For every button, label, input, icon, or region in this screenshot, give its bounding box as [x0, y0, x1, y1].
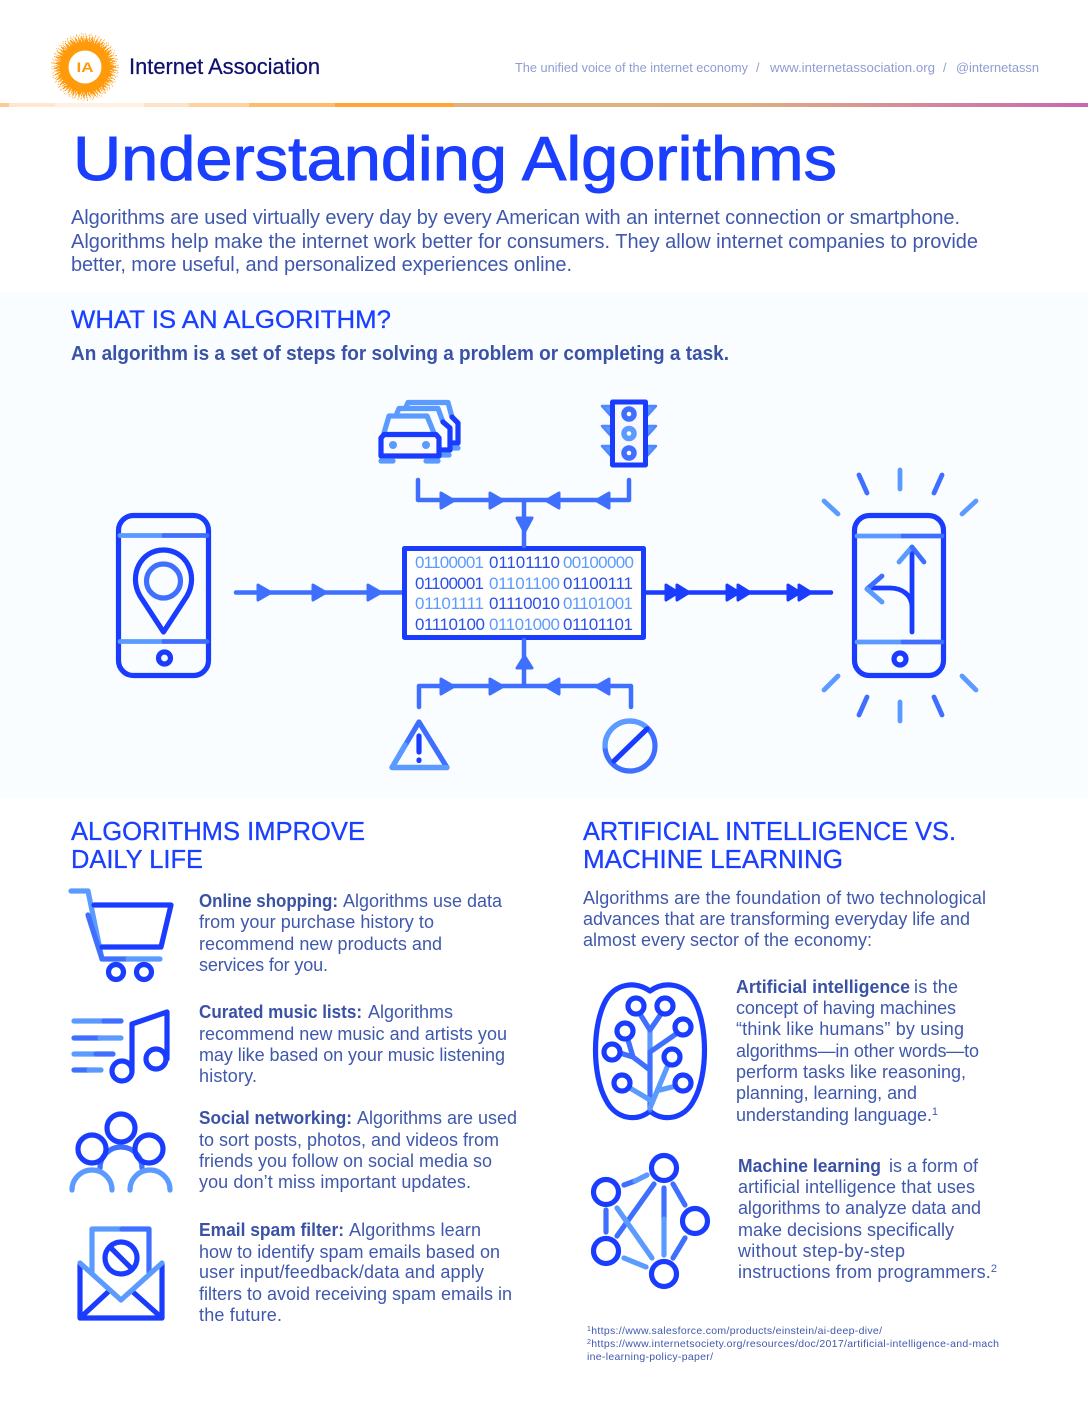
text: artificial intelligence: perform tasks like reasoning,	[736, 1062, 966, 1082]
text: artificial intelligence: concept of having machines	[736, 998, 956, 1018]
intro paragraph: better, more useful, and personalized experiences online.	[71, 254, 572, 276]
text: social networking: friends you follow on social media so	[199, 1151, 492, 1171]
algorithm box with binary code: 01100001	[415, 553, 484, 572]
algorithm box with binary code: 01101110	[489, 553, 560, 572]
icon: email spam filter	[80, 1229, 162, 1318]
heading: algorithms improve daily life: DAILY LIFE	[71, 844, 203, 874]
algorithm box with binary code: 01101000	[489, 615, 560, 634]
algorithm box with binary code: 00100000	[563, 553, 634, 572]
text: online shopping	[199, 891, 503, 975]
text: AI vs ML intro	[583, 888, 986, 950]
footnotes: 2	[587, 1339, 591, 1346]
intro paragraph: Algorithms help make the internet work better for consumers. They allow internet companies to provide	[71, 231, 978, 253]
definition: An algorithm is a set of steps for solving a problem or completing a task.	[71, 343, 729, 365]
text: online shopping: services for you.	[199, 955, 328, 975]
text: machine learning: Machine learning	[738, 1156, 881, 1176]
text: social networking: you don’t miss important updates.	[199, 1172, 471, 1192]
heading: AI vs ML: ARTIFICIAL INTELLIGENCE VS.	[583, 816, 956, 846]
algorithm box with binary code: 01101111	[415, 594, 484, 613]
text: online shopping: recommend new products and	[199, 934, 442, 954]
text: artificial intelligence: “think like humans” by using	[736, 1019, 964, 1039]
footnotes: https://www.internetsociety.org/resources/doc/2017/artificial-intelligence-and-mach	[591, 1338, 999, 1350]
header tagline and links: /	[756, 61, 760, 75]
icon: phone with directions	[854, 516, 944, 676]
header tagline and links: www.internetassociation.org	[769, 61, 935, 75]
text: machine learning: without step-by-step	[737, 1241, 905, 1261]
icon: music list	[74, 1012, 167, 1081]
text: artificial intelligence: is the	[914, 977, 958, 997]
text: email spam filter: how to identify spam emails based on	[199, 1242, 500, 1262]
text: curated music lists: may like based on your music listening	[199, 1045, 505, 1065]
arrow: output to result phone	[646, 585, 831, 600]
footnotes: ine-learning-policy-paper/	[587, 1351, 713, 1363]
footnotes: 1	[587, 1326, 591, 1333]
text: curated music lists: recommend new music and artists you	[199, 1024, 507, 1044]
icon: warning triangle	[392, 722, 447, 768]
text: curated music lists	[199, 1002, 507, 1086]
icon: shopping cart	[71, 891, 171, 980]
icon: traffic light	[602, 402, 656, 465]
text: email spam filter	[199, 1220, 512, 1325]
algorithm box with binary code: 01100111	[563, 574, 633, 593]
icon: traffic cars	[381, 402, 458, 461]
text: curated music lists: history.	[199, 1066, 257, 1086]
text: AI vs ML intro: almost every sector of the economy:	[583, 930, 872, 950]
text: artificial intelligence	[736, 977, 979, 1125]
panel: algorithms improve daily life	[71, 816, 517, 1325]
logo: Internet Association: IA	[76, 59, 94, 75]
arrows: bottom inputs to algorithm	[419, 640, 631, 707]
intro paragraph	[71, 207, 978, 276]
icon: brain tree	[596, 985, 704, 1118]
algorithm box with binary code: 01110010	[489, 594, 560, 613]
algorithm box with binary code: 01110100	[415, 615, 485, 634]
text: social networking	[199, 1108, 517, 1192]
icon: phone with location pin	[118, 516, 208, 676]
title: Understanding Algorithms	[73, 125, 837, 194]
text: email spam filter: user input/feedback/data and apply	[199, 1262, 484, 1282]
text: curated music lists: Algorithms	[368, 1002, 453, 1022]
text: artificial intelligence: Artificial intelligence	[736, 977, 910, 997]
heading: algorithms improve daily life	[71, 816, 365, 874]
panel: what is an algorithm	[0, 292, 1088, 798]
algorithm box with binary code: 01101001	[563, 594, 633, 613]
text: machine learning: is a form of	[889, 1156, 979, 1176]
text: artificial intelligence: algorithms—in other words—to	[736, 1041, 979, 1061]
heading: what is an algorithm: WHAT IS AN ALGORITHM?	[71, 306, 391, 334]
text: artificial intelligence: planning, learning, and	[736, 1083, 917, 1103]
arrow: input from phone to algorithm	[236, 585, 404, 600]
text: curated music lists: Curated music lists:	[199, 1002, 362, 1022]
text: social networking: to sort posts, photos, and videos from	[199, 1130, 499, 1150]
text: social networking: Social networking:	[199, 1108, 352, 1128]
text: email spam filter: the future.	[199, 1305, 282, 1325]
header tagline and links: @internetassn	[956, 61, 1039, 75]
heading: AI vs ML	[583, 816, 956, 874]
algorithm box with binary code: 01101100	[489, 574, 560, 593]
text: machine learning: make decisions specifically	[738, 1220, 954, 1240]
text: online shopping: Online shopping:	[199, 891, 338, 911]
text: online shopping: Algorithms use data	[343, 891, 503, 911]
colored header rule	[0, 103, 1088, 107]
heading: AI vs ML: MACHINE LEARNING	[583, 844, 843, 874]
algorithm box with binary code: 01100001	[415, 574, 484, 593]
text: machine learning: 2	[991, 1263, 997, 1275]
header tagline and links	[515, 61, 1039, 75]
footnotes	[587, 1325, 999, 1363]
logo: Internet Association: Internet Association	[129, 54, 320, 79]
text: artificial intelligence: understanding language.	[736, 1105, 932, 1125]
footnotes: https://www.salesforce.com/products/einstein/ai-deep-dive/	[591, 1325, 882, 1337]
logo: Internet Association	[52, 34, 320, 100]
heading: algorithms improve daily life: ALGORITHMS IMPROVE	[71, 816, 365, 846]
icon: prohibited sign	[605, 721, 655, 771]
text: AI vs ML intro: Algorithms are the foundation of two technological	[583, 888, 986, 908]
intro paragraph: Algorithms are used virtually every day by every American with an internet connection or smartphone.	[71, 207, 960, 229]
text: email spam filter: Email spam filter:	[199, 1220, 344, 1240]
text: email spam filter: Algorithms learn	[349, 1220, 481, 1240]
text: machine learning: artificial intelligence that uses	[738, 1177, 975, 1197]
header tagline and links: /	[943, 61, 947, 75]
icon: rays around phone	[824, 470, 976, 721]
text: AI vs ML intro: advances that are transforming everyday life and	[583, 909, 970, 929]
icon: social network people	[72, 1114, 170, 1190]
text: machine learning: instructions from programmers.	[738, 1262, 991, 1282]
algorithm box with binary code: 01101101	[563, 615, 633, 634]
icon: neural network	[594, 1156, 708, 1286]
header tagline and links: The unified voice of the internet economy	[515, 61, 749, 75]
panel: header	[0, 34, 1088, 107]
text: email spam filter: filters to avoid receiving spam emails in	[199, 1284, 512, 1304]
panel: artificial intelligence vs machine learning	[583, 816, 999, 1363]
text: social networking: Algorithms are used	[357, 1108, 517, 1128]
arrows: top inputs to algorithm	[418, 480, 629, 546]
text: machine learning: algorithms to analyze data and	[738, 1198, 981, 1218]
text: online shopping: from your purchase history to	[199, 912, 434, 932]
algorithm box with binary code	[404, 548, 644, 638]
text: artificial intelligence: 1	[932, 1106, 938, 1118]
text: machine learning	[737, 1156, 997, 1282]
